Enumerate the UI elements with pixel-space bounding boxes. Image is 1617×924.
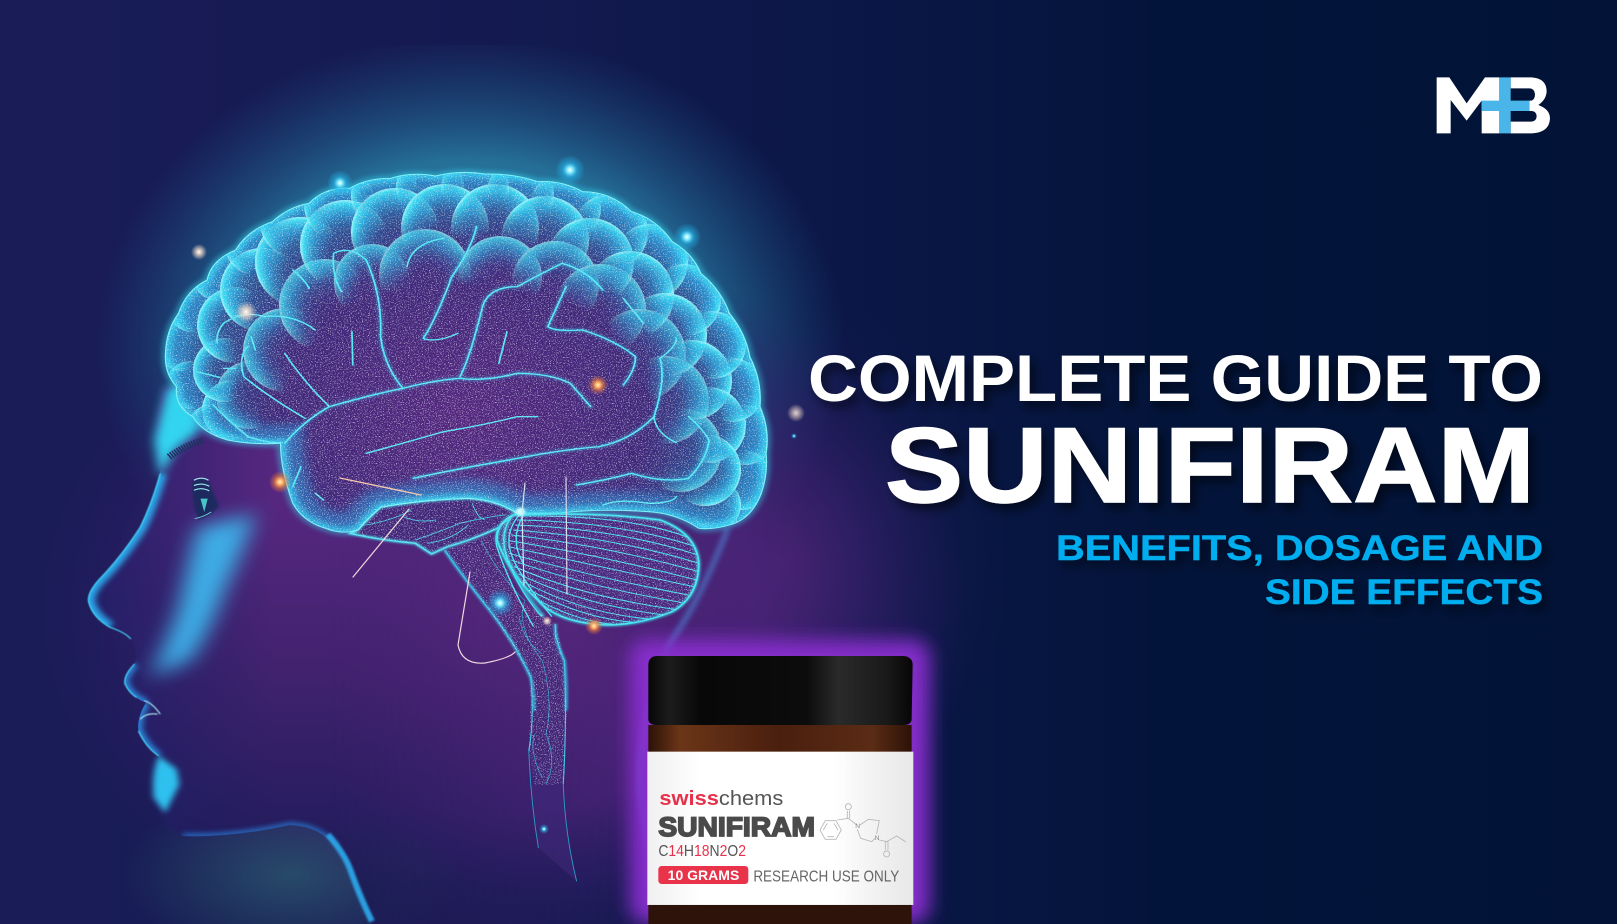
subtitle line 2: SIDE EFFECTS <box>1265 573 1543 612</box>
face shading and inner rim light <box>60 387 336 924</box>
subtitle line 1: BENEFITS, DOSAGE AND <box>1056 529 1543 568</box>
letter M <box>1437 77 1499 133</box>
brand name: swisschems <box>659 787 783 810</box>
jar label <box>647 752 913 905</box>
neck highlight <box>328 834 372 921</box>
brainstem and spinal cord <box>445 534 577 881</box>
gyri crisp lines <box>197 227 709 505</box>
lower brain section <box>350 498 517 554</box>
title line 1: COMPLETE GUIDE TO <box>808 341 1543 415</box>
brain glow and base <box>165 172 767 554</box>
10 grams badge: 10 GRAMS <box>668 867 739 883</box>
molecule atom labels: N <box>855 823 860 830</box>
head fill <box>100 386 534 924</box>
glowing sparks <box>191 155 805 834</box>
eyebrow <box>169 440 204 457</box>
cheek glow <box>150 514 255 677</box>
title <box>808 341 1543 525</box>
research use only: RESEARCH USE ONLY <box>753 869 899 886</box>
title line 2: SUNIFIRAM <box>885 405 1535 525</box>
eye <box>192 478 219 520</box>
product jar <box>630 640 930 924</box>
thin nerve lines <box>340 477 567 663</box>
letter B <box>1511 77 1550 133</box>
back of neck arc <box>640 528 728 860</box>
molecule diagram <box>820 804 906 857</box>
brain outer edge <box>165 172 767 532</box>
outer lobes row <box>192 404 212 424</box>
speckle texture <box>150 150 790 785</box>
cerebellum <box>496 514 699 627</box>
molecule atom labels <box>855 823 880 842</box>
crisp profile rim <box>88 474 160 756</box>
jar purple glow <box>630 640 930 923</box>
middle lobes row <box>202 380 243 440</box>
product name on label: SUNIFIRAM <box>658 812 815 842</box>
lips <box>140 701 160 719</box>
fold halo <box>213 227 709 485</box>
jar lid <box>648 656 913 725</box>
cortex lobes <box>166 173 766 528</box>
forehead glow <box>154 387 200 477</box>
amber glass band <box>648 725 912 752</box>
brain folds and rim <box>165 172 767 627</box>
junction highlight <box>516 508 525 516</box>
inner lobes row <box>213 223 731 501</box>
chin glow <box>153 756 179 813</box>
plus sign <box>1482 77 1529 133</box>
head silhouette in profile <box>87 381 534 924</box>
subtitle <box>1056 529 1543 612</box>
lower amber glass <box>648 905 912 924</box>
logo: M+B <box>1437 77 1550 133</box>
molecule atom labels: N <box>875 835 880 842</box>
chemical formula: C14H18N2O2 <box>658 843 746 860</box>
brain <box>150 148 790 785</box>
